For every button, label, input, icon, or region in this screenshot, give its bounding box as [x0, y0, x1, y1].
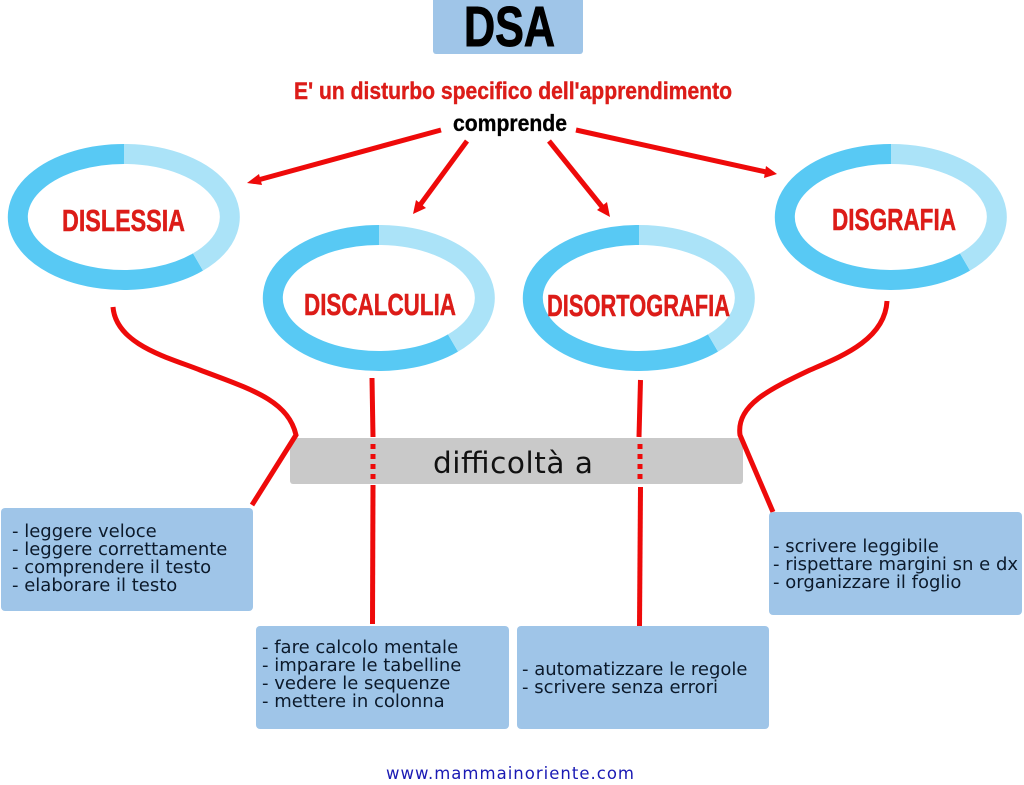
panel: dislessia difficulties: - leggere veloce	[12, 521, 157, 542]
panel: dislessia difficulties: - elaborare il testo	[12, 575, 177, 596]
label: comprende: comprende	[453, 110, 567, 136]
arrow: to disgrafia	[576, 130, 777, 178]
ring: dislessia: DISLESSIA	[62, 203, 185, 238]
panel: disortografia difficulties	[517, 626, 769, 729]
arrow: to dislessia	[247, 130, 441, 185]
panel: discalculia difficulties	[256, 626, 509, 729]
arrow: to discalculia	[413, 141, 467, 214]
panel: disgrafia difficulties: - organizzare il foglio	[773, 572, 961, 593]
subtitle: E' un disturbo specifico dell'apprendimento	[294, 78, 732, 105]
ring: disgrafia: DISGRAFIA	[832, 202, 956, 237]
panel: disortografia difficulties: - scrivere senza errori	[522, 677, 718, 698]
panel: dislessia difficulties: - comprendere il testo	[12, 557, 211, 578]
connector: disortografia	[639, 380, 640, 626]
footer: website: www.mammainoriente.com	[386, 764, 634, 783]
panel: discalculia difficulties: - vedere le sequenze	[262, 673, 450, 694]
bar: difficoltà a	[290, 438, 743, 484]
ring: discalculia	[273, 235, 485, 361]
ring: dislessia	[18, 154, 230, 280]
connector: dislessia	[113, 307, 296, 505]
bar: difficoltà a: difficoltà a	[433, 446, 593, 480]
panel: dislessia difficulties: - leggere correttamente	[12, 539, 227, 560]
ring: disortografia	[533, 235, 745, 361]
ring: discalculia: DISCALCULIA	[304, 287, 456, 322]
panel: discalculia difficulties: - imparare le tabelline	[262, 655, 461, 676]
panel: disgrafia difficulties: - rispettare margini sn e dx	[773, 554, 1018, 575]
arrow: to disortografia	[549, 141, 610, 217]
panel: disortografia difficulties: - automatizzare le regole	[522, 659, 747, 680]
connector: discalculia	[372, 378, 373, 624]
panel: disgrafia difficulties: - scrivere leggibile	[773, 536, 939, 557]
panel: discalculia difficulties: - mettere in colonna	[262, 691, 445, 712]
panel: disgrafia difficulties	[769, 512, 1022, 615]
panel: discalculia difficulties: - fare calcolo mentale	[262, 637, 458, 658]
ring: disgrafia	[785, 154, 997, 280]
panel: dislessia difficulties	[1, 508, 253, 611]
ring: disortografia: DISORTOGRAFIA	[547, 288, 730, 323]
connector: disgrafia	[740, 301, 887, 512]
